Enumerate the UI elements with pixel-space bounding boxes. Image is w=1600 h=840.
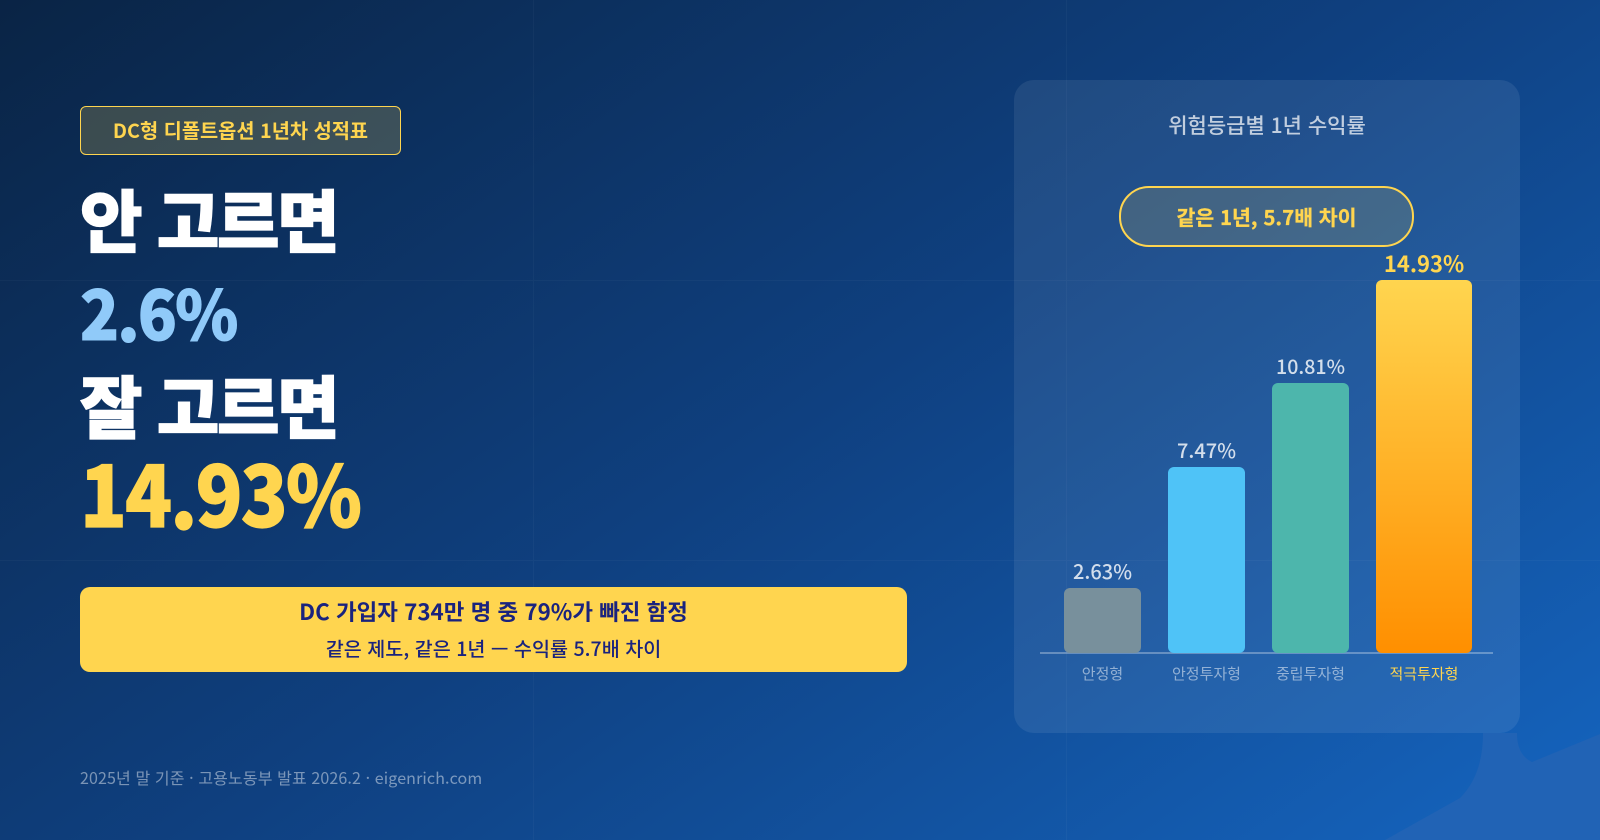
bar: 중립투자형 [1272, 383, 1349, 653]
value label 2.63%: 2.63% [1073, 556, 1132, 585]
bar chart [1040, 247, 1493, 684]
bar: 안정투자형 [1168, 467, 1245, 653]
pill callout [1119, 186, 1414, 247]
callout subline: 같은 제도, 같은 1년 — 수익률 5.7배 차이 [326, 633, 661, 662]
category label 안정형: 안정형 [1082, 663, 1123, 684]
value label 14.93%: 14.93% [1384, 247, 1464, 279]
value: 14.93%: 14.93% [80, 431, 360, 552]
category label 적극투자형: 적극투자형 [1389, 663, 1458, 684]
value: 2.6%: 2.6% [80, 261, 236, 360]
bar: 안정형 [1064, 588, 1141, 653]
badge [80, 106, 401, 155]
axis line [1040, 652, 1493, 654]
badge: DC형 디폴트옵션 1년차 성적표 [113, 115, 368, 144]
value label 10.81%: 10.81% [1276, 351, 1345, 380]
pill callout: 같은 1년, 5.7배 차이 [1176, 201, 1357, 231]
callout [80, 587, 907, 672]
panel: chart [1014, 80, 1520, 733]
callout headline: DC 가입자 734만 명 중 79%가 빠진 함정 [299, 595, 688, 627]
title: 안 고르면: 안 고르면 [80, 168, 337, 267]
category label 중립투자형: 중립투자형 [1276, 663, 1345, 684]
panel heading: 위험등급별 1년 수익률 [1168, 110, 1366, 140]
bar: 적극투자형 [1376, 280, 1472, 653]
value label 7.47%: 7.47% [1177, 435, 1236, 464]
footer source: 2025년 말 기준 · 고용노동부 발표 2026.2 · eigenrich.com [80, 765, 482, 789]
title: 잘 고르면: 잘 고르면 [80, 354, 337, 453]
category label 안정투자형: 안정투자형 [1172, 663, 1241, 684]
